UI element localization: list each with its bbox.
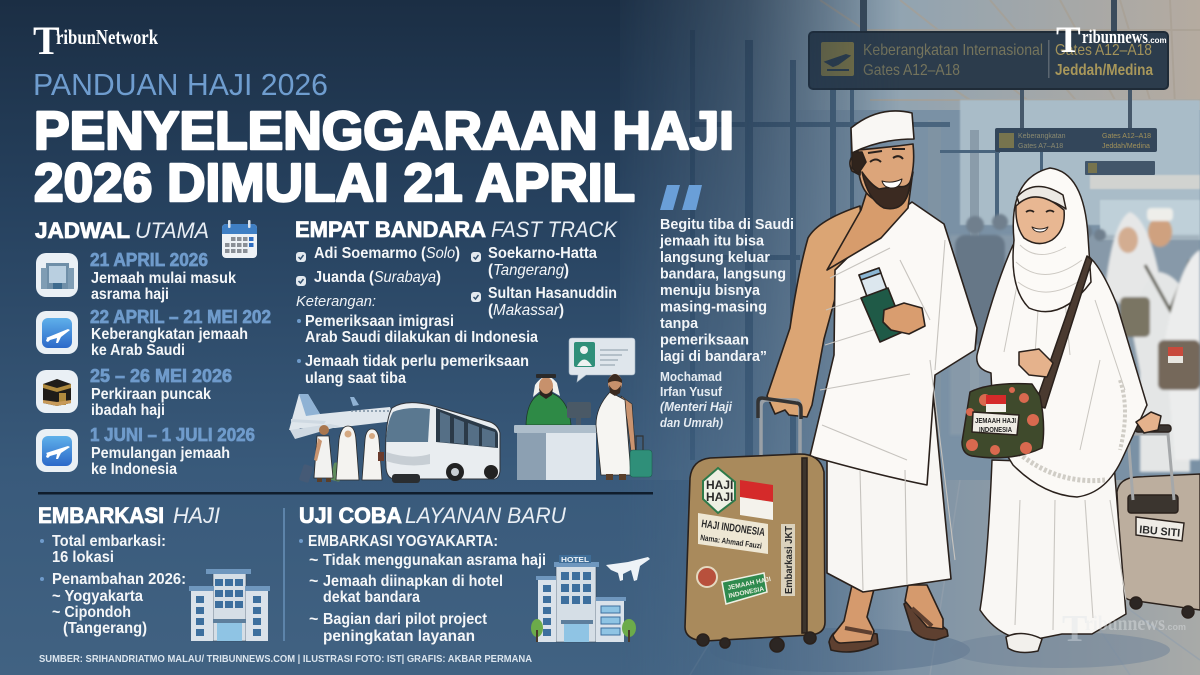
heading: jadwal utama: JADWAL [35,218,130,243]
bare arm [767,206,862,417]
schedule item: 22 april [36,307,271,359]
face [1016,197,1064,244]
quote attribution: Irfan Yusuf [660,384,723,399]
name label: HAJI INDONESIA [701,518,766,539]
vertical divider [283,508,285,641]
logo: tribunnews: .com [1148,36,1167,45]
airport sign: far [1085,161,1155,175]
quote attribution: dan Umrah) [660,415,723,430]
list: trial points: EMBARKASI YOGYAKARTA: [308,533,498,550]
quote attribution: Mochamad [660,369,722,384]
eyes and smile [1026,210,1054,212]
illustration: brown suitcase: INDONESIA [728,586,765,600]
logo: tribunnews: T [1056,20,1081,61]
list: trial points: dekat bandara [323,589,420,606]
name label: Nama: Ahmad Fauzi [700,533,762,551]
eyes [868,149,905,162]
watermark: tribunnews: T [1062,608,1087,650]
illustration: id speech bubble [569,338,635,382]
schedule item: 25-26 mei: ibadah haji [91,402,165,419]
beard [862,172,913,209]
watermark: tribunnews: ribunnews [1085,611,1165,635]
list: trial points: Bagian dari pilot project [323,611,488,628]
round sticker [697,567,717,587]
airports checklist: Adi Soemarmo (Solo) [314,245,460,262]
schedule item: 21 april: asrama haji [91,286,169,303]
ear and hair [850,155,861,175]
logo: TribunNetwork [33,18,158,63]
divider [38,492,653,494]
background crowd [950,208,1200,472]
schedule item: 22 april: 22 APRIL – 21 MEI 202 [90,307,271,327]
airport sign: small departures: Jeddah/Medina [1102,143,1150,150]
schedule item: 1 juni [36,425,255,478]
airport sign: small departures [995,128,1157,152]
panel: uji coba layanan baru [299,503,650,645]
quote text: tanpa [660,315,699,332]
heading: embarkasi haji: HAJI [173,503,220,528]
list: embarkasi facts: (Tangerang) [63,620,147,637]
schedule item: 25-26 mei: Perkiraan puncak [91,386,211,403]
upper drape [810,202,977,485]
illustration: hotel with plane [531,555,650,642]
side label [781,524,795,596]
schedule item: 21 april [36,250,236,303]
floral bag [962,384,1044,458]
schedule item: 1 juni: ke Indonesia [91,461,177,478]
illustration: bus [386,403,500,483]
quote text: langsung keluar [660,249,770,266]
skirt [827,349,951,592]
schedule item: 1 juni: 1 JUNI – 1 JULI 2026 [90,425,255,445]
wheels [697,634,709,646]
illustration: airplane [289,394,395,439]
legs and sandals [829,585,948,652]
cape folds [1004,270,1125,481]
heading: uji coba: LAYANAN BARU [405,503,566,528]
schedule item: 1 juni: Pemulangan jemaah [91,445,230,462]
handle [761,400,800,460]
illustration: female pilgrim [962,168,1161,652]
airport sign: small departures: Gates A12–A18 [1102,133,1151,140]
panel: empat bandara fast track [289,217,652,483]
airports checklist: Soekarno-Hatta [488,245,597,262]
quote attribution [660,369,732,430]
list: embarkasi facts: ~ Yogyakarta [52,588,143,605]
list: embarkasi facts: ~ Cipondoh [52,604,131,621]
quote text: Begitu tiba di Saudi [660,216,794,233]
airports checklist: Sultan Hasanuddin [488,285,617,302]
illustration: grey suitcase: IBU SITI [1139,524,1181,540]
airport sign: international departures [809,32,1168,89]
airport sign: international departures: Jeddah/Medina [1055,62,1153,79]
title: 2026 DIMULAI 21 APRIL [34,153,635,213]
quote text: pemeriksaan [660,332,749,348]
notes: keterangan: Arab Saudi dilakukan di Indonesia [305,329,538,346]
illustration: brown suitcase: HAJI [706,478,733,492]
heading: embarkasi haji: EMBARKASI [38,503,164,528]
heading: uji coba [299,503,566,528]
illustration: brown suitcase: HAJI [706,490,733,504]
airport sign: small departures: Keberangkatan [1018,133,1066,140]
list: trial points: Jemaah diinapkan di hotel [323,573,503,590]
heading: empat bandara: EMPAT BANDARA [295,217,486,242]
airport sign: small departures: Gates A7–A18 [1018,143,1063,150]
panel: quote [659,185,794,430]
haji badge [703,468,735,513]
illustration: grey suitcase [1117,425,1200,618]
illustration: pilgrims with luggage [299,425,384,483]
illustration: brown suitcase: Embarkasi JKT [783,525,795,594]
schedule item: 25-26 mei [36,366,232,419]
boarding pass [859,268,889,302]
neck and chest [827,178,912,270]
passport [861,288,905,342]
fold lines [820,240,955,590]
logo: tribunnews [1056,20,1167,61]
airport sign: international departures: Keberangkatan Internasional [863,42,1043,59]
quote text: jemaah itu bisa [659,232,765,250]
notes: keterangan: Jemaah tidak perlu pemeriksaan [305,353,529,370]
flag sticker [740,480,773,520]
body [685,454,825,641]
quote text: lagi di bandara” [660,348,767,365]
airports checklist: (Makassar) [488,302,564,319]
list: embarkasi facts: Penambahan 2026: [52,571,186,588]
illustration: male pilgrim [767,111,977,652]
heading: empat bandara [295,217,618,242]
title [34,101,734,213]
logo: TribunNetwork: T [33,18,60,63]
cap [851,111,914,153]
hand [1019,349,1053,377]
panel: embarkasi haji [38,503,270,641]
name label [698,513,768,554]
airport sign: international departures: Gates A12–A18 [1055,42,1152,59]
quote text: bandara, langsung [660,266,786,282]
title: PENYELENGGARAAN HAJI [34,101,734,161]
schedule item: 21 april: Jemaah mulai masuk [91,270,236,287]
heading: jadwal utama: UTAMA [135,218,209,243]
watermark: tribunnews: .com [1165,622,1186,632]
shoes [1006,633,1042,652]
illustration: brown suitcase [685,398,825,652]
quote text [659,216,794,365]
heading: uji coba: UJI COBA [299,503,402,528]
strap [1035,256,1092,408]
heading: empat bandara: FAST TRACK [491,217,618,242]
smile [882,179,902,188]
schedule item: 22 april: ke Arab Saudi [91,342,185,359]
quote text: masing-masing [660,298,767,316]
hijab [1013,168,1091,312]
list: embarkasi facts: 16 lokasi [52,549,114,566]
source credit: SUMBER: SRIHANDRIATMO MALAU/ TRIBUNNEWS.COM | ILUSTRASI FOTO: IST| GRAFIS: AKBAR PERMANA [39,653,532,665]
bag label [972,412,1019,435]
list: trial points: peningkatan layanan [323,628,475,645]
notes: keterangan: Keterangan: [296,293,376,310]
notes: keterangan [296,293,538,387]
head [858,144,914,203]
icon: calendar [222,220,257,258]
illustration: pilgrim at counter [596,374,652,480]
heading: jadwal utama [35,218,209,243]
illustration: embarkation building [189,569,270,641]
green sticker [722,573,767,604]
airport sign: international departures: Gates A12–A18 [863,62,960,79]
left panel overlay ensuring text contrast [620,0,886,675]
airports checklist: (Tangerang) [488,262,569,279]
illustration: female pilgrim: JEMAAH HAJI [975,418,1016,425]
schedule item: 25-26 mei: 25 – 26 MEI 2026 [90,366,232,386]
logo: TribunNetwork: ribunNetwork [56,25,158,49]
illustration: hotel with plane: HOTEL [561,555,589,564]
hand on suitcase [1136,412,1161,433]
hand with passport [883,303,925,334]
cape [977,245,1147,497]
heading kicker: PANDUAN HAJI 2026 [33,67,328,102]
quote attribution: (Menteri Haji [660,399,732,414]
dress [980,460,1126,640]
schedule item: 21 april: 21 APRIL 2026 [90,250,208,270]
inner cap [1017,186,1066,209]
airports checklist [296,245,617,319]
list: embarkasi facts: Total embarkasi: [52,533,166,550]
panel: jadwal utama [35,218,271,478]
illustration: female pilgrim: INDONESIA [979,427,1012,434]
tag on background luggage [1168,347,1183,363]
icon: quote mark [660,185,702,210]
watermark: tribunnews [1062,608,1186,650]
notes: keterangan: Pemeriksaan imigrasi [305,313,454,330]
schedule item: 22 april: Keberangkatan jemaah [91,326,248,343]
list: embarkasi facts [40,533,186,637]
list: trial points: ~ [309,611,318,628]
list: trial points: Tidak menggunakan asrama haji [323,552,546,569]
zip panel [802,458,807,633]
airports checklist: Juanda (Surabaya) [314,269,441,286]
list: trial points: ~ [309,552,318,569]
notes: keterangan: ulang saat tiba [305,370,406,387]
bag flag [986,395,1006,412]
list: trial points: ~ [309,573,318,590]
logo: tribunnews: ribunnews [1082,27,1148,48]
illustration: brown suitcase: JEMAAH HAJI [727,576,772,592]
list: trial points [299,533,546,645]
illustration: immigration officer at desk [514,374,599,480]
quote text: menuju bisnya [660,282,761,299]
